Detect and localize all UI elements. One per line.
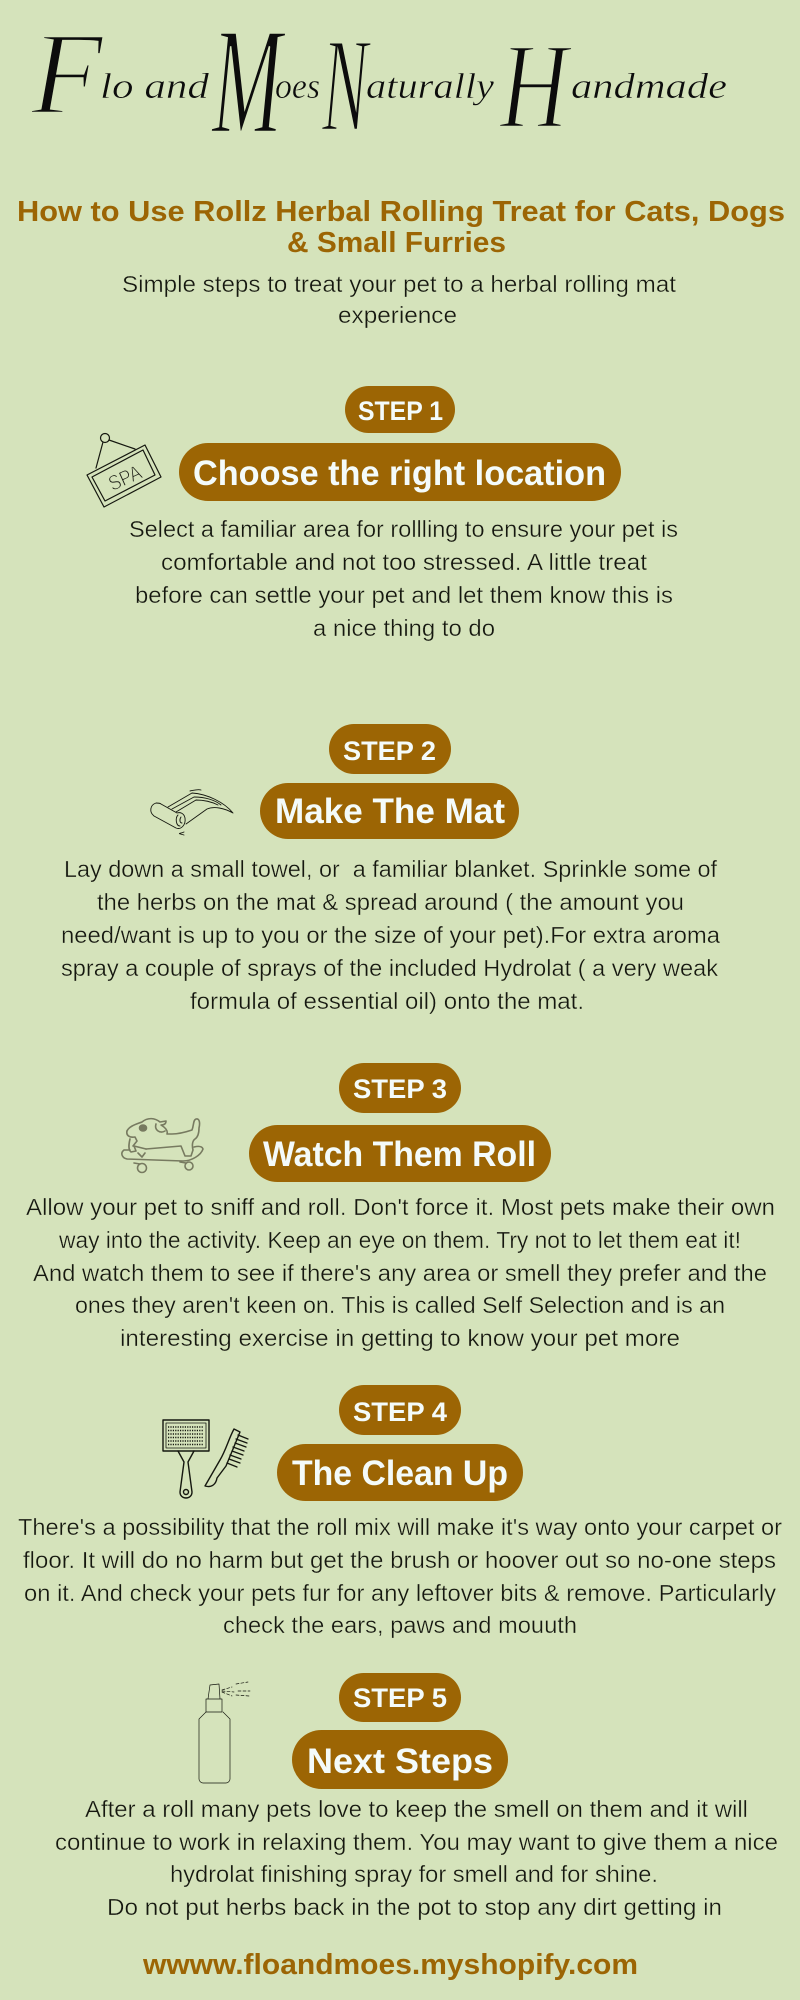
title: brand script wordmark: andmade	[571, 66, 727, 106]
icon: rolled mat	[151, 790, 233, 835]
step 2 text: need/want is up to you or the size of your pet).For extra aroma	[61, 922, 720, 948]
step 3 text: And watch them to see if there's any area or smell they prefer and the	[33, 1260, 767, 1286]
step 2 text: formula of essential oil) onto the mat.	[190, 988, 584, 1014]
step 1 badge	[345, 386, 455, 433]
subheading	[122, 271, 677, 328]
step 5 text: After a roll many pets love to keep the smell on them and it will	[85, 1796, 748, 1822]
step 5 title: Next Steps	[307, 1742, 493, 1781]
step 1 title: Choose the right location	[193, 454, 606, 493]
step 2 badge	[329, 724, 451, 774]
step 2 text	[61, 856, 720, 1014]
step 3 badge	[339, 1063, 461, 1113]
step 3 title: Watch Them Roll	[263, 1135, 536, 1174]
footer: website url: wwww.floandmoes.myshopify.com	[142, 1949, 638, 1981]
step 2 title: Make The Mat	[275, 792, 505, 831]
step 1 text: comfortable and not too stressed. A little treat	[161, 549, 648, 575]
step 4 text: check the ears, paws and mouuth	[223, 1612, 577, 1638]
title: brand script wordmark	[30, 0, 727, 165]
panel: step 2	[61, 724, 720, 1014]
title: brand script wordmark: M	[211, 0, 286, 165]
step 2 text: spray a couple of sprays of the included Hydrolat ( a very weak	[61, 955, 718, 981]
heading: How to Use Rollz Herbal Rolling Treat for Cats, Dogs	[17, 196, 785, 228]
step 4 badge	[339, 1385, 461, 1435]
panel: step 5	[55, 1673, 778, 1920]
step 1 text: before can settle your pet and let them know this is	[135, 582, 673, 608]
step 2 badge: STEP 2	[343, 736, 436, 766]
step 2 text: Lay down a small towel, or a familiar blanket. Sprinkle some of	[64, 856, 718, 882]
step 4 text: There's a possibility that the roll mix will make it's way onto your carpet or	[18, 1514, 782, 1540]
step 1 text: Select a familiar area for rollling to ensure your pet is	[129, 516, 678, 542]
step 5 badge	[339, 1673, 461, 1722]
icon: dog on skateboard	[122, 1119, 203, 1172]
step 3 text: Allow your pet to sniff and roll. Don't force it. Most pets make their own	[26, 1194, 775, 1220]
title: brand script wordmark: F	[30, 8, 105, 139]
step 5 text: hydrolat finishing spray for smell and for shine.	[170, 1861, 658, 1887]
title: brand script wordmark: aturally	[366, 66, 494, 106]
step 4 badge: STEP 4	[353, 1397, 447, 1427]
step 1 badge: STEP 1	[358, 396, 443, 426]
panel: step 1	[87, 386, 678, 641]
step 4 text: floor. It will do no harm but get the brush or hoover out so no-one steps	[23, 1547, 776, 1573]
step 5 text: Do not put herbs back in the pot to stop any dirt getting in	[107, 1894, 722, 1920]
title: brand script wordmark: N	[321, 11, 371, 159]
step 4 title: The Clean Up	[292, 1454, 508, 1493]
panel: step 3	[26, 1063, 775, 1351]
icon: spa sign	[87, 434, 161, 507]
step 2 title	[260, 783, 519, 839]
title: brand script wordmark: H	[498, 19, 573, 154]
step 3 text	[26, 1194, 775, 1351]
icon: slicker brush and comb	[163, 1420, 248, 1498]
step 5 badge: STEP 5	[353, 1683, 447, 1713]
step 5 text	[55, 1796, 778, 1920]
step 3 title	[249, 1125, 551, 1182]
icon: spa sign: SPA	[105, 461, 145, 496]
step 4 title	[277, 1444, 523, 1501]
step 5 text: continue to work in relaxing them. You may want to give them a nice	[55, 1829, 778, 1855]
step 1 title	[179, 443, 621, 501]
step 1 text	[129, 516, 678, 641]
step 5 title	[292, 1730, 508, 1789]
step 3 badge: STEP 3	[353, 1074, 447, 1104]
step 3 text: ones they aren't keen on. This is called Self Selection and is an	[75, 1292, 725, 1318]
heading	[17, 196, 785, 259]
step 4 text: on it. And check your pets fur for any leftover bits & remove. Particularly	[24, 1580, 777, 1606]
step 3 text: interesting exercise in getting to know your pet more	[120, 1325, 680, 1351]
heading: & Small Furries	[287, 227, 506, 259]
step 2 text: the herbs on the mat & spread around ( the amount you	[97, 889, 684, 915]
title: brand script wordmark: oes	[275, 66, 320, 106]
subheading: experience	[338, 302, 457, 328]
icon: spray bottle	[199, 1682, 250, 1783]
step 4 text	[18, 1514, 782, 1638]
title: brand script wordmark: lo and	[100, 66, 210, 106]
panel: step 4	[18, 1385, 782, 1638]
step 3 text: way into the activity. Keep an eye on them. Try not to let them eat it!	[58, 1227, 741, 1253]
subheading: Simple steps to treat your pet to a herbal rolling mat	[122, 271, 677, 297]
step 1 text: a nice thing to do	[313, 615, 495, 641]
